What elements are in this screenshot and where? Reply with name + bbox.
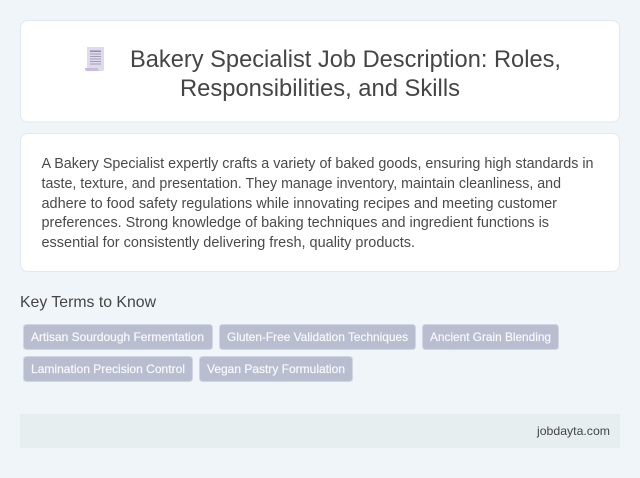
tag: Gluten-Free Validation Techniques [220,324,416,350]
tag: Artisan Sourdough Fermentation: Artisan Sourdough Fermentation [31,330,204,344]
panel: title card [20,20,620,122]
tag: Gluten-Free Validation Techniques: Gluten-Free Validation Techniques [227,330,408,344]
text block: description: preferences. Strong knowledge of baking techniques and ingredient functions is [42,215,549,231]
tag: Vegan Pastry Formulation [200,356,352,382]
text block: description: adhere to food safety regulations while innovating recipes and meeting customer [42,196,557,212]
heading: title [130,46,561,102]
heading: key terms: Key Terms to Know [20,294,156,311]
text block: description: taste, texture, and presentation. They manage inventory, maintain cleanliness, and [42,176,561,192]
icon: paper scroll [85,47,104,71]
tag: Vegan Pastry Formulation: Vegan Pastry Formulation [207,362,345,376]
text block: description: essential for consistently delivering fresh, quality products. [42,235,415,251]
panel: description card [20,134,620,272]
tag: Lamination Precision Control: Lamination Precision Control [31,362,185,376]
footer bar [20,414,620,448]
tag: Artisan Sourdough Fermentation [24,324,212,350]
tag: Ancient Grain Blending: Ancient Grain Blending [430,330,551,344]
tag: Lamination Precision Control [24,356,192,382]
footer bar: jobdayta.com [536,424,610,438]
heading: title: Bakery Specialist Job Description: Roles, [130,46,561,73]
text block: description [42,156,594,251]
text block: description: A Bakery Specialist expertly crafts a variety of baked goods, ensuring high standards in [42,156,594,172]
tag: Ancient Grain Blending [422,324,558,350]
heading: title: Responsibilities, and Skills [180,75,460,102]
